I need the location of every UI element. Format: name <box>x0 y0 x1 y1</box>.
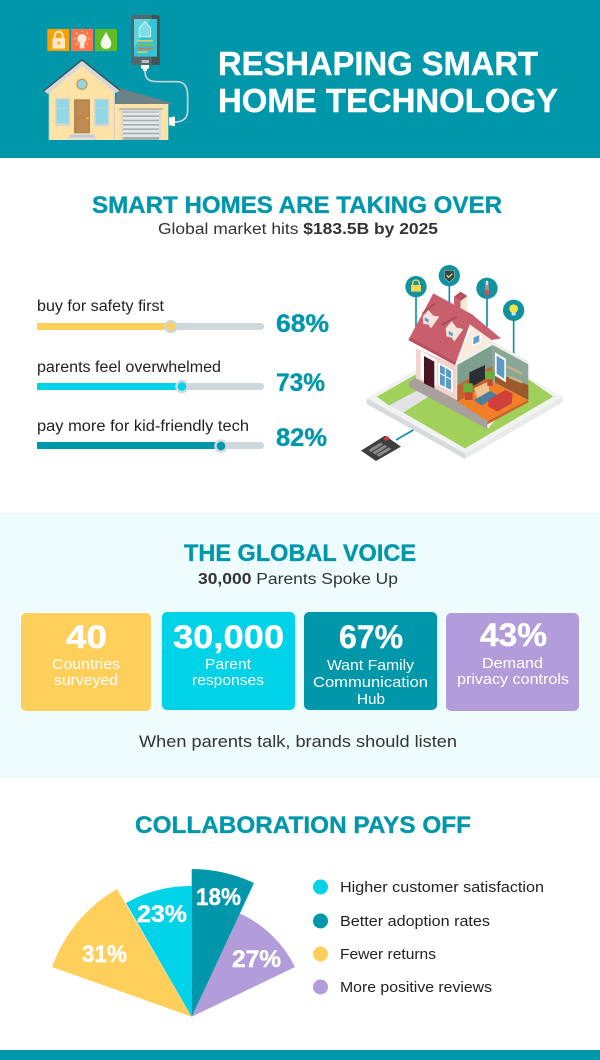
stat bar: kid-friendly 82% <box>37 418 327 452</box>
legend: More positive reviews <box>340 979 492 996</box>
heading: SMART HOMES ARE TAKING OVER <box>92 192 502 219</box>
stat bar: overwhelmed 73%: 73% <box>276 369 325 397</box>
pie chart: 18% <box>196 884 241 911</box>
card: 40 countries: 40 <box>66 619 107 655</box>
card: 43% privacy: privacy controls <box>457 671 569 688</box>
closing line: When parents talk, brands should listen <box>139 733 457 751</box>
heading: THE GLOBAL VOICE <box>184 540 416 567</box>
card: 30,000 responses: responses <box>192 672 264 689</box>
panel: collaboration pays off <box>0 778 600 1050</box>
subheading: 30,000 Parents Spoke Up <box>198 571 398 588</box>
stat bar: safety 68%: 68% <box>276 310 329 338</box>
title <box>218 45 558 119</box>
heading: COLLABORATION PAYS OFF <box>135 812 471 839</box>
card: 43% privacy: Demand <box>482 655 543 672</box>
panel: the global voice <box>0 513 600 778</box>
stat bar: safety 68%: buy for safety first <box>37 298 165 315</box>
card: 67% hub: Communication <box>313 674 428 691</box>
stat bar: kid-friendly 82%: 82% <box>276 424 327 452</box>
legend <box>313 879 544 996</box>
card: 67% hub: Want Family <box>327 657 415 674</box>
stat bar: overwhelmed 73%: parents feel overwhelmed <box>37 359 221 376</box>
pie chart <box>52 869 295 1017</box>
panel: header <box>0 0 600 158</box>
pie chart: 31% <box>82 941 127 968</box>
legend: Higher customer satisfaction <box>340 879 544 896</box>
title: HOME TECHNOLOGY <box>218 82 558 119</box>
card: 40 countries: surveyed <box>54 672 118 689</box>
card: 40 countries: Countries <box>52 656 120 673</box>
card: 43% privacy: 43% <box>480 617 547 653</box>
title: RESHAPING SMART <box>218 45 538 82</box>
illustration: smart house with phone <box>43 15 188 140</box>
legend: Better adoption rates <box>340 913 490 930</box>
pie chart: 27% <box>232 946 281 973</box>
card: 67% hub: Hub <box>357 691 385 708</box>
illustration: isometric smart house <box>361 265 563 461</box>
card: 30,000 responses: 30,000 <box>173 619 284 655</box>
legend: Fewer returns <box>340 946 436 963</box>
subheading: Global market hits $183.5B by 2025 <box>158 221 438 238</box>
stat bar: safety 68% <box>37 298 329 338</box>
card: 30,000 responses: Parent <box>205 656 252 673</box>
pie chart: 23% <box>137 901 187 928</box>
card: 40 countries <box>21 613 151 711</box>
stat bar: kid-friendly 82%: pay more for kid-friendly tech <box>37 418 249 435</box>
card: 67% hub <box>304 612 437 710</box>
footer band <box>0 1050 600 1060</box>
stat bar: overwhelmed 73% <box>37 359 325 397</box>
card: 67% hub: 67% <box>339 619 403 655</box>
card: 43% privacy <box>446 613 579 711</box>
panel: smart homes are taking over <box>0 158 600 513</box>
card: 30,000 responses <box>162 612 295 710</box>
